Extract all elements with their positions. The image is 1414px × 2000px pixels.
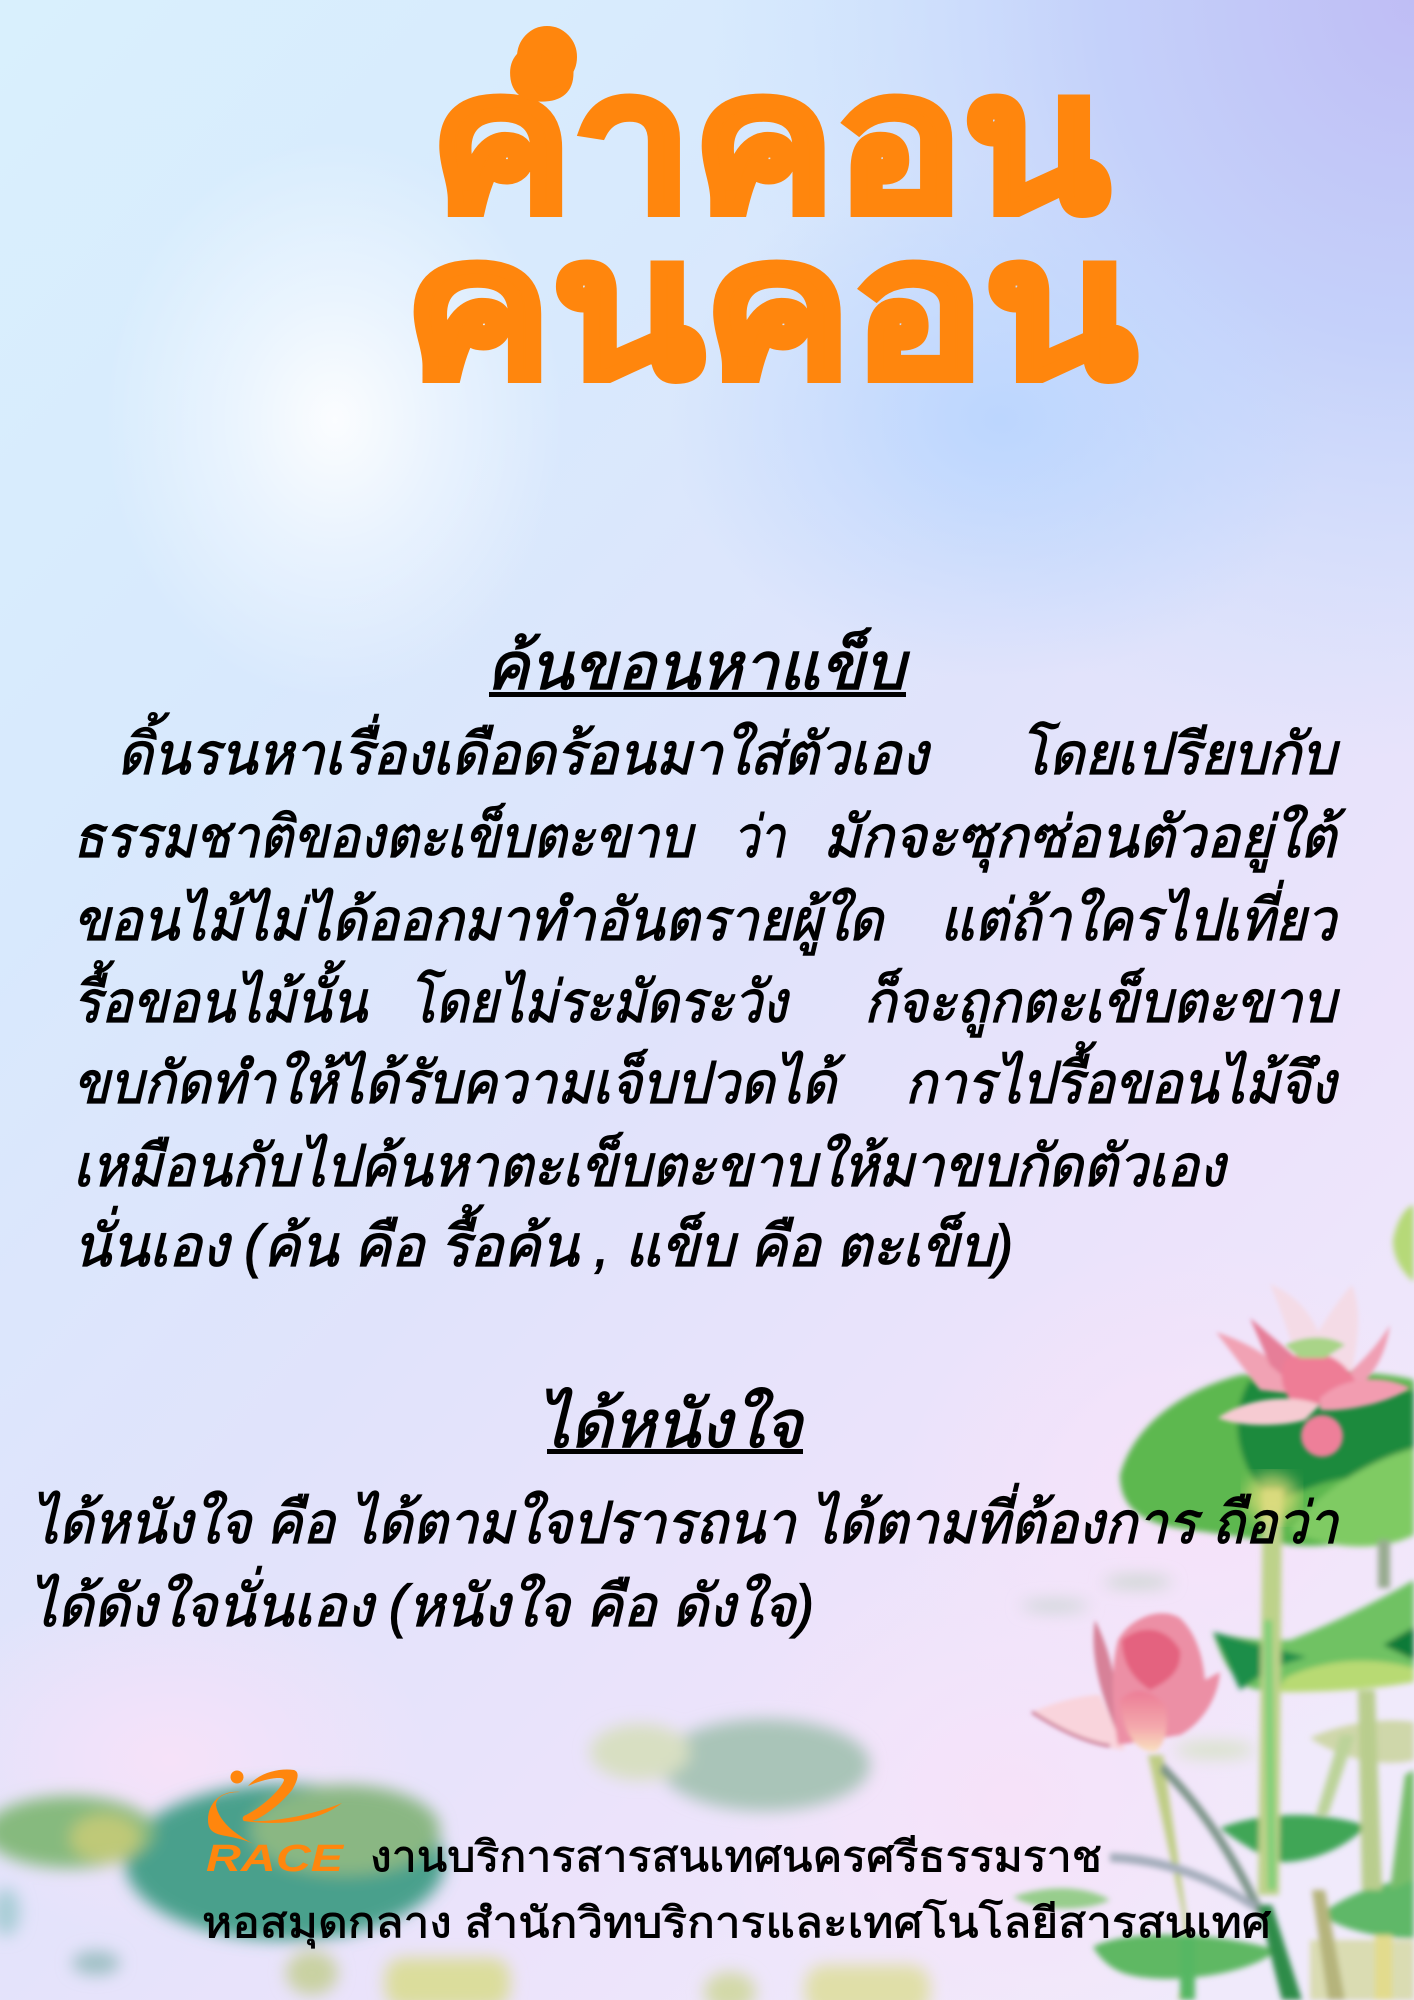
logo wordmark: RACE [206,1838,345,1880]
logo: RACE [206,1770,345,1880]
text block: ค้นขอนหาแข็บ explanation: เหมือนกับไปค้นหาตะเข็บตะขาบให้มาขบกัดตัวเอง [73,1132,1228,1199]
text block: ค้นขอนหาแข็บ explanation: ขอนไม้ไม่ได้ออกมาทำอันตรายผู้ใด [73,887,886,956]
text block: ได้หนังใจ explanation: ได้ดังใจนั่นเอง (หนังใจ คือ ดังใจ) [29,1566,814,1639]
footer credits: งานบริการสารสนเทศนครศรีธรรมราช [370,1833,1102,1880]
lower pink lotus [1032,1613,1220,1752]
upper pink lotus [1216,1284,1410,1457]
text block: ค้นขอนหาแข็บ explanation: นั่นเอง (ค้น คือ รื้อค้น , แข็บ คือ ตะเข็บ) [73,1204,1013,1279]
text block: ค้นขอนหาแข็บ explanation [73,712,1346,1279]
heading: ค้นขอนหาแข็บ: ค้นขอนหาแข็บ [486,627,910,703]
text block: ค้นขอนหาแข็บ explanation: ดิ้นรนหาเรื่องเดือดร้อนมาใส่ตัวเอง [117,712,931,787]
text block: ได้หนังใจ explanation [29,1483,1340,1639]
footer credits [202,1833,1271,1949]
footer credits: หอสมุดกลาง สำนักวิทบริการและเทศโนโลยีสารสนเทศ [202,1898,1271,1949]
leaves and stems [1013,1205,1414,2000]
title: คำคอน [430,34,1109,252]
text block: ค้นขอนหาแข็บ explanation: แต่ถ้าใครไปเที่ยว [940,880,1339,953]
text block: ค้นขอนหาแข็บ explanation: โดยเปรียบกับ [1019,721,1340,787]
background pond reflections [0,1576,1255,2000]
logo swoosh [208,1770,342,1844]
text block: ค้นขอนหาแข็บ explanation: ธรรมชาติของตะเข็บตะขาบ [73,803,696,870]
text block: ค้นขอนหาแข็บ explanation: ขบกัดทำให้ได้รับความเจ็บปวดได้ [73,1049,845,1116]
lotus plant illustration [1013,1205,1414,2000]
title: คนคอน [404,200,1136,418]
text block: ได้หนังใจ explanation: ได้หนังใจ คือ ได้ตามใจปรารถนา ได้ตามที่ต้องการ ถือว่า [31,1483,1340,1556]
text block: ค้นขอนหาแข็บ explanation: การไปรื้อขอนไม้จึง [905,1041,1339,1116]
text block: ค้นขอนหาแข็บ explanation: มักจะซุกซ่อนตัวอยู่ใต้ [823,804,1346,873]
text block: ค้นขอนหาแข็บ explanation: ว่า [733,805,787,870]
text block: ค้นขอนหาแข็บ explanation: โดยไม่ระมัดระวัง [408,969,790,1035]
title [404,34,1136,418]
text block: ค้นขอนหาแข็บ explanation: รื้อขอนไม้นั้น [73,960,368,1035]
heading: ได้หนังใจ: ได้หนังใจ [537,1387,805,1461]
text block: ค้นขอนหาแข็บ explanation: ก็จะถูกตะเข็บตะขาบ [864,968,1340,1038]
